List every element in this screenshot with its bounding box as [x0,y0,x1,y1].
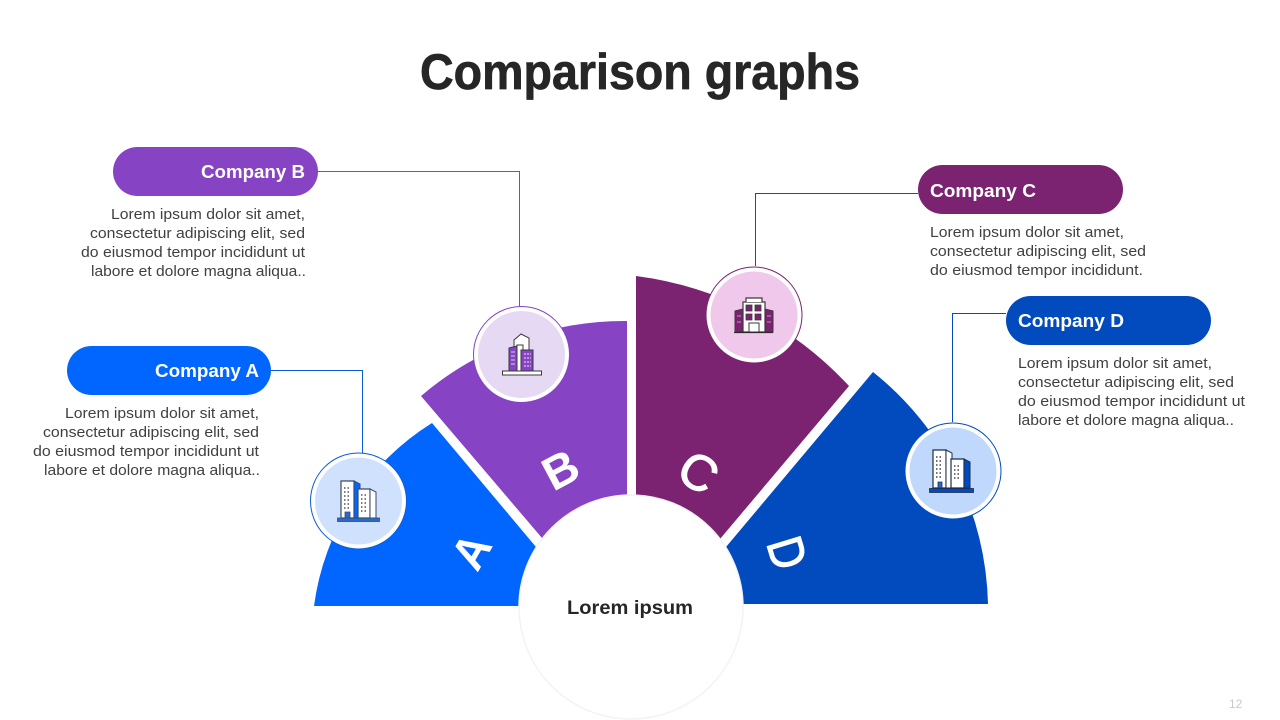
panel: company D [1006,296,1245,429]
text: company B [81,207,306,280]
letter B: B [533,438,588,501]
sector A [314,423,560,606]
panel: company C [918,165,1146,279]
letter C: C [668,439,729,506]
pill: company C [918,165,1123,214]
text: company A: Lorem ipsum dolor sit amet, [65,406,259,422]
letter D: D [756,530,819,576]
text: company B: do eiusmod tempor incididunt ut [81,245,305,261]
pill: company B [113,147,318,196]
centre circle [519,495,743,719]
text: company B: labore et dolore magna aliqua.. [91,264,306,280]
page number: 12 [1229,697,1243,711]
pill: company D [1006,296,1211,345]
text: company D: Lorem ipsum dolor sit amet, [1018,356,1212,372]
icon: company B building [474,306,570,402]
text: company C: do eiusmod tempor incididunt. [930,263,1143,279]
text: company D: labore et dolore magna aliqua.. [1018,413,1234,429]
icon: company A building [310,453,406,549]
text: company A [33,406,260,479]
panel: company A [33,346,271,479]
heading: company A: Company A [155,360,259,381]
sector D [700,372,988,604]
text: company B: Lorem ipsum dolor sit amet, [111,207,305,223]
panel: company B [81,147,318,280]
connector: company C [756,194,918,266]
heading: company B: Company B [201,161,305,182]
icon: company D building [905,423,1001,519]
connector: company D [952,314,1006,422]
heading: company C: Company C [930,180,1036,201]
text: company D: consectetur adipiscing elit, sed [1018,375,1234,391]
sector C [636,276,849,560]
text: company A: consectetur adipiscing elit, sed [43,425,259,441]
connector: company A [271,370,362,453]
text: company A: labore et dolore magna aliqua.. [44,463,260,479]
pill: company A [67,346,271,395]
centre label: Lorem ipsum [567,598,693,619]
sector B [421,321,627,560]
text: company D: do eiusmod tempor incididunt ut [1018,394,1245,410]
text: company A: do eiusmod tempor incididunt ut [33,444,259,460]
text: company C [930,225,1146,279]
letter A: A [441,524,502,578]
text: company D [1018,356,1245,429]
text: company B: consectetur adipiscing elit, sed [90,226,305,242]
heading: company D: Company D [1018,310,1124,331]
title: Comparison graphs [420,44,860,100]
icon: company C building [706,267,802,363]
text: company C: Lorem ipsum dolor sit amet, [930,225,1124,241]
connector: company B [318,172,520,306]
text: company C: consectetur adipiscing elit, sed [930,244,1146,260]
